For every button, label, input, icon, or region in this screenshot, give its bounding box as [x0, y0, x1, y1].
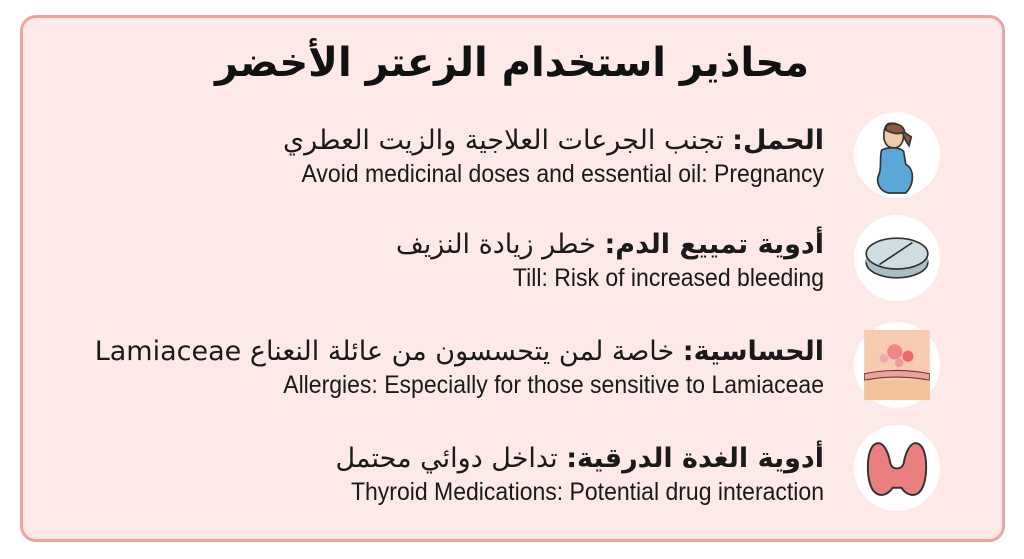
item: blood thinners — [396, 226, 824, 292]
item: allergies: Allergies: Especially for those sensitive to Lamiaceae — [283, 371, 824, 399]
item: thyroid: أدوية الغدة الدرقية: تداخل دوائي محتمل — [335, 443, 824, 474]
icon: thyroid — [854, 425, 940, 511]
item: allergies: الحساسية: خاصة لمن يتحسسون من عائلة النعناع Lamiaceae — [95, 336, 824, 367]
item: pregnancy: الحمل: تجنب الجرعات العلاجية والزيت العطري — [283, 125, 824, 156]
item: pregnancy: Avoid medicinal doses and essential oil: Pregnancy — [301, 160, 824, 188]
item: thyroid: Thyroid Medications: Potential drug interaction — [351, 478, 824, 506]
item: thyroid — [335, 440, 824, 506]
item: pregnancy — [283, 125, 824, 188]
title: محاذير استخدام الزعتر الأخضر — [215, 40, 809, 86]
icon: skin rash — [854, 322, 940, 408]
icon: pregnant woman — [854, 112, 940, 198]
item: allergies — [95, 336, 824, 399]
item: blood thinners: أدوية تمييع الدم: خطر زيادة النزيف — [396, 229, 824, 260]
item: blood thinners: Till: Risk of increased bleeding — [513, 264, 824, 292]
icon: pill — [854, 215, 940, 301]
